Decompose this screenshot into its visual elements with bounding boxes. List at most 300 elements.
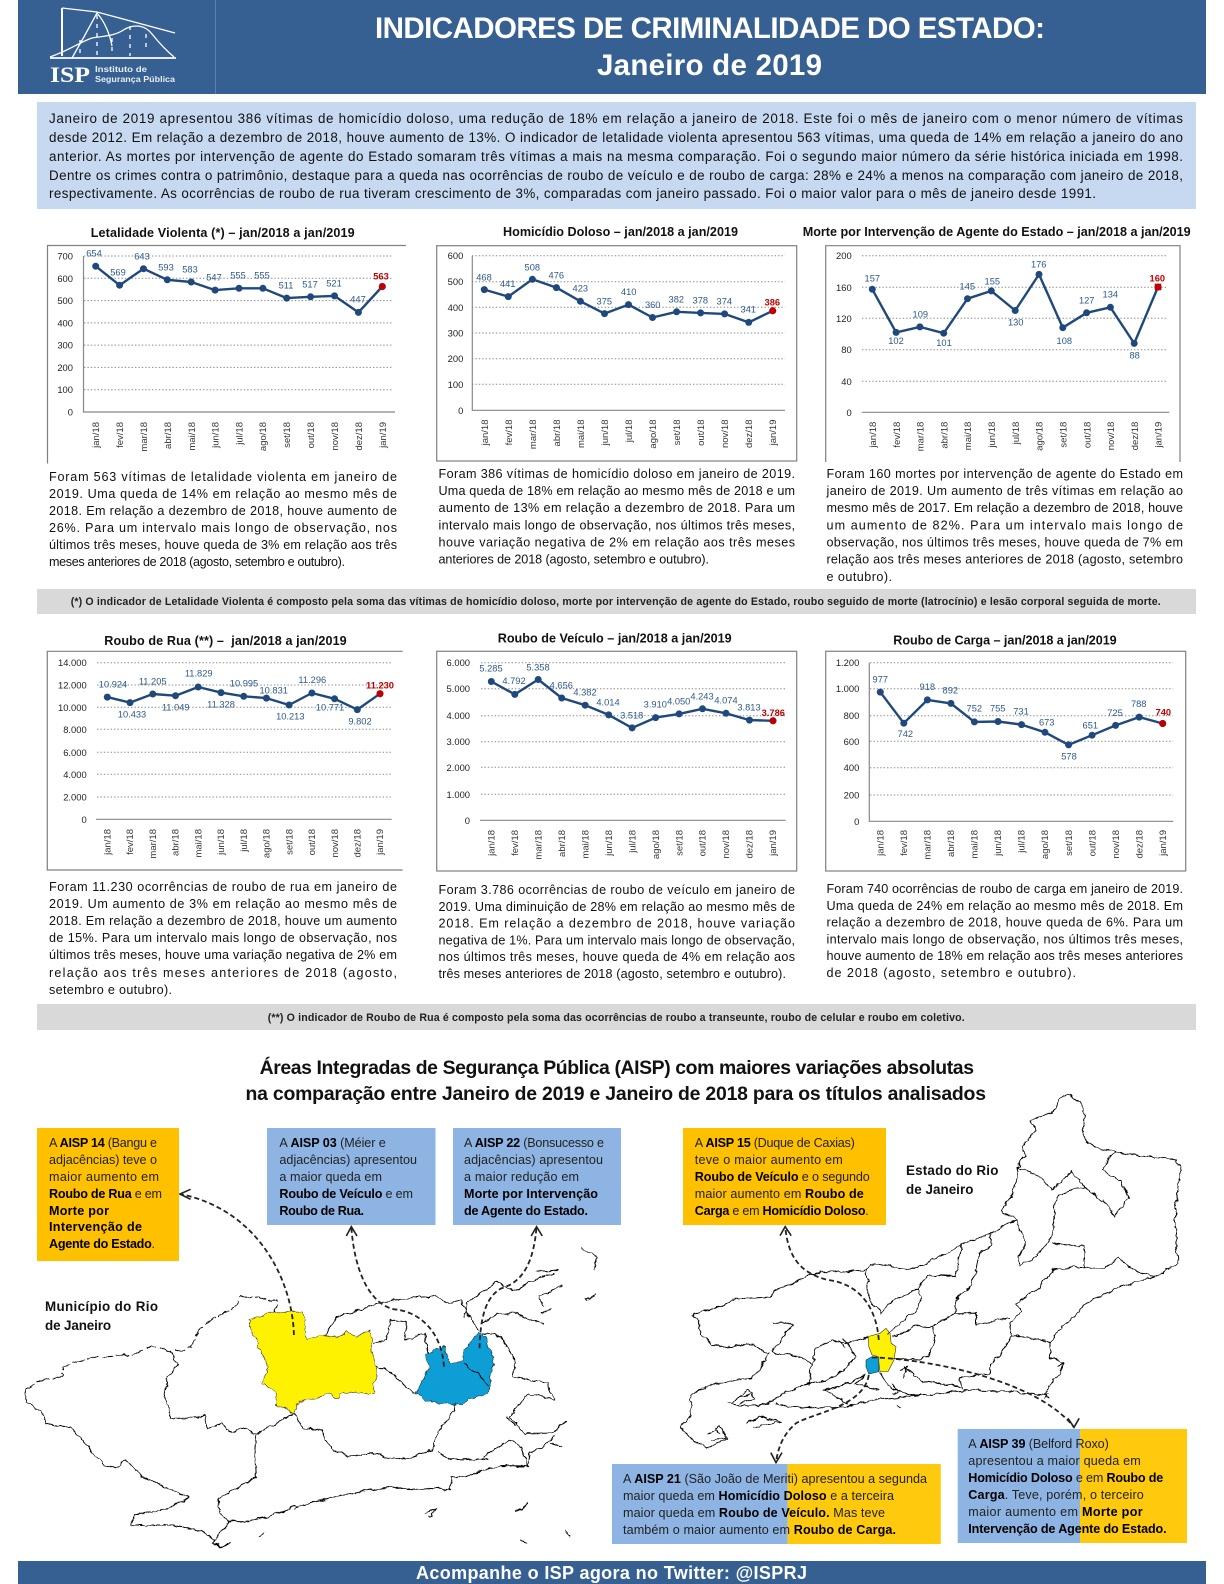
chart: Homicídio Doloso: 423 — [573, 283, 588, 293]
text: Roubo de Rua: 2019. Um aumento de 3% em relação ao mesmo mês de — [49, 897, 397, 911]
chart: Homicídio Doloso: 400 — [448, 302, 463, 313]
text: Roubo de Veículo — [438, 883, 795, 981]
chart: Homicídio Doloso: set/18 — [672, 420, 683, 445]
chart: Morte por Intervenção de Agente do Estado: 40 — [841, 376, 852, 387]
chart: Homicídio Doloso: mar/18 — [528, 420, 539, 449]
footnote band: Roubo de Rua — [37, 1004, 1196, 1030]
chart: Letalidade Violenta: 569 — [110, 268, 126, 278]
chart: Letalidade Violenta: mar/18 — [139, 422, 150, 452]
chart: Morte por Intervenção de Agente do Estado: 145 — [960, 281, 975, 291]
section heading: AISP — [246, 1056, 986, 1105]
label: Estado do Rio de Janeiro: Estado do Rio — [906, 1163, 998, 1178]
chart: Morte por Intervenção de Agente do Estado: 101 — [936, 338, 952, 348]
chart: Roubo de Carga: 578 — [1061, 751, 1077, 761]
chart: Morte por Intervenção de Agente do Estado: mar/18 — [916, 422, 927, 451]
chart: Roubo de Veículo: 2.000 — [447, 762, 470, 773]
arrow: AISP 14 — [180, 1189, 294, 1335]
chart: Roubo de Carga: 400 — [844, 762, 859, 773]
callout: AISP 15: maior aumento em Roubo de — [695, 1187, 864, 1201]
chart: Roubo de Carga: 788 — [1131, 699, 1146, 709]
chart: Morte por Intervenção de Agente do Estado: abr/18 — [939, 422, 950, 449]
callout: AISP 22: a maior redução em — [464, 1170, 579, 1184]
text: Letalidade Violenta: últimos três meses, houve queda de 3% em relação aos três — [49, 538, 397, 552]
chart title: Homicídio Doloso – jan/2018 a jan/2019 — [503, 225, 738, 239]
chart: Roubo de Rua — [47, 634, 403, 870]
callout: AISP 22 — [453, 1128, 621, 1225]
text: Roubo de Carga: Foram 740 ocorrências de roubo de carga em janeiro de 2019. — [826, 882, 1183, 896]
chart: Roubo de Veículo: 5.358 — [526, 662, 550, 672]
chart: Morte por Intervenção de Agente do Estado: 102 — [888, 336, 904, 346]
callout: AISP 15: A AISP 15 (Duque de Caxias) — [695, 1136, 855, 1150]
chart: Roubo de Rua: 9.802 — [348, 717, 372, 727]
chart: Roubo de Rua: 11.296 — [298, 675, 326, 685]
text: Roubo de Rua — [49, 880, 397, 997]
chart: Roubo de Carga: 977 — [873, 674, 888, 684]
chart: Letalidade Violenta: 555 — [254, 270, 270, 280]
callout: AISP 22: de Agente do Estado. — [464, 1204, 588, 1218]
chart: Roubo de Veículo: 4.050 — [667, 696, 690, 706]
chart title: Morte por Intervenção de Agente do Estado – jan/2018 a jan/2019 — [803, 225, 1191, 239]
logo: ISP — [50, 8, 176, 87]
callout: AISP 39: Intervenção de Agente do Estado. — [968, 1522, 1167, 1536]
chart: Roubo de Carga: 800 — [844, 710, 859, 721]
chart: Morte por Intervenção de Agente do Estado: fev/18 — [892, 422, 903, 448]
chart: Roubo de Rua: 2.000 — [63, 792, 87, 802]
chart: Roubo de Veículo: 3.786 — [762, 708, 785, 718]
text: Roubo de Veículo: negativa de 1%. Para um intervalo mais longo de observação, — [438, 934, 795, 948]
text: Roubo de Carga: de 2018 (agosto, setembro e outubro). — [826, 966, 1076, 980]
text: Roubo de Carga: houve aumento de 18% em relação aos três meses anteriores — [826, 949, 1183, 963]
chart: Roubo de Veículo: mai/18 — [580, 830, 591, 859]
chart: Morte por Intervenção de Agente do Estado: nov/18 — [1106, 422, 1117, 450]
chart: Homicídio Doloso: 508 — [525, 262, 540, 272]
chart: Roubo de Carga: 742 — [898, 729, 913, 739]
text: Roubo de Veículo: 2018. Em relação a dezembro de 2018, houve variação — [438, 916, 795, 930]
chart: Roubo de Veículo: 3.000 — [447, 736, 470, 747]
text: Letalidade Violenta: 2019. Uma queda de 14% em relação ao mesmo mês de — [49, 487, 397, 501]
chart: Roubo de Rua: 8.000 — [63, 724, 87, 735]
chart: Homicídio Doloso: jan/19 — [768, 420, 779, 446]
text: Letalidade Violenta: 2018. Em relação a dezembro de 2018, houve aumento de — [49, 504, 397, 518]
chart: Letalidade Violenta: 517 — [302, 280, 318, 290]
chart: Roubo de Rua: dez/18 — [352, 829, 364, 858]
chart: Letalidade Violenta: jun/18 — [210, 422, 222, 449]
chart: Roubo de Veículo: 3.518 — [620, 710, 643, 720]
chart: Letalidade Violenta: out/18 — [306, 422, 317, 448]
callout: AISP 14: Agente do Estado. — [49, 1237, 155, 1251]
chart: Morte por Intervenção de Agente do Estado: 88 — [1130, 350, 1140, 360]
callout: AISP 21: maior queda em Roubo de Veículo. Mas teve — [623, 1506, 885, 1520]
chart: Letalidade Violenta: 511 — [279, 280, 293, 290]
label: Município do Rio de Janeiro — [45, 1299, 158, 1333]
chart: Morte por Intervenção de Agente do Estado: 160 — [836, 282, 852, 293]
chart: Letalidade Violenta: 583 — [182, 264, 198, 274]
label: Estado do Rio de Janeiro: de Janeiro — [906, 1182, 973, 1197]
chart: Letalidade Violenta: set/18 — [282, 422, 293, 448]
text: Morte por Intervenção: janeiro de 2019. Um aumento de três vítimas em relação ao — [826, 484, 1183, 498]
chart: Letalidade Violenta: 100 — [57, 384, 73, 395]
chart: Roubo de Rua: 11.049 — [162, 702, 190, 712]
chart: Homicídio Doloso: ago/18 — [648, 420, 659, 449]
chart: Roubo de Veículo: 4.656 — [550, 681, 573, 691]
chart: Roubo de Veículo: dez/18 — [745, 830, 756, 859]
chart: Roubo de Rua: 10.831 — [259, 685, 288, 695]
chart: Letalidade Violenta: 200 — [57, 362, 73, 373]
chart: Roubo de Carga: set/18 — [1064, 830, 1075, 856]
chart: Letalidade Violenta: dez/18 — [354, 422, 365, 451]
chart: Letalidade Violenta: 547 — [206, 272, 222, 282]
text: Roubo de Veículo: 2019. Uma diminuição de 28% em relação ao mesmo mês de — [438, 900, 795, 914]
chart: Roubo de Rua: 10.771 — [316, 702, 344, 712]
callout: AISP 21: maior queda em Homicídio Doloso e a terceira — [623, 1489, 894, 1503]
chart: Roubo de Rua: 0 — [81, 814, 87, 825]
chart: Morte por Intervenção de Agente do Estado — [803, 225, 1191, 462]
callout: AISP 39: Homicídio Doloso e em Roubo de — [968, 1471, 1163, 1485]
chart: Letalidade Violenta: fev/18 — [115, 422, 126, 448]
summary text panel: desde 2012. Em relação a dezembro de 2018, houve aumento de 13%. O indicador de letalidade violenta apresentou 563 vítimas, uma queda de 14% em relação a janeiro do ano — [49, 130, 1183, 145]
chart: Homicídio Doloso: jul/18 — [624, 420, 635, 443]
chart: Roubo de Rua: 10.995 — [230, 679, 258, 689]
chart: Roubo de Veículo: nov/18 — [721, 830, 732, 859]
chart title: Roubo de Rua (**) – jan/2018 a jan/2019 — [104, 634, 347, 648]
chart: Letalidade Violenta: 0 — [68, 406, 73, 418]
chart: Roubo de Rua: 10.000 — [58, 702, 87, 713]
chart: Homicídio Doloso: 0 — [458, 405, 463, 416]
callout: AISP 14 — [37, 1128, 179, 1261]
text: Roubo de Veículo: nos últimos três meses, houve queda de 4% em relação aos — [438, 950, 795, 964]
text: Roubo de Carga: intervalo mais longo de observação, nos últimos três meses, — [826, 932, 1183, 946]
arrow: AISP 39 — [872, 1357, 1079, 1427]
chart: Roubo de Carga — [826, 634, 1186, 871]
chart: Roubo de Rua: ago/18 — [262, 829, 273, 858]
arrow: AISP 03 — [346, 1227, 444, 1367]
chart: Letalidade Violenta: nov/18 — [330, 422, 341, 451]
chart: Roubo de Rua: jun/18 — [216, 829, 227, 856]
chart: Homicídio Doloso — [437, 225, 797, 461]
section heading: AISP: Áreas Integradas de Segurança Pública (AISP) com maiores variações absolutas — [260, 1056, 974, 1079]
map: Estado do Rio de Janeiro — [679, 1093, 1181, 1463]
chart: Homicídio Doloso: 386 — [765, 297, 780, 307]
text: Homicídio Doloso: Foram 386 vítimas de homicídio doloso em janeiro de 2019. — [438, 467, 795, 481]
chart: Morte por Intervenção de Agente do Estado: out/18 — [1082, 422, 1093, 448]
callout: AISP 39: maior aumento em Morte por — [968, 1505, 1143, 1519]
callout: AISP 22: adjacências) apresentou — [464, 1153, 603, 1167]
text: Morte por Intervenção: mesmo mês de 2017. Em relação a dezembro de 2018, houve — [826, 501, 1183, 515]
chart: Roubo de Rua: 10.213 — [276, 711, 305, 721]
text: Homicídio Doloso — [438, 467, 795, 566]
chart: Letalidade Violenta: 563 — [373, 272, 389, 282]
chart: Roubo de Carga: 740 — [1156, 708, 1171, 718]
chart: Homicídio Doloso: jun/18 — [600, 420, 611, 446]
chart: Roubo de Carga: abr/18 — [946, 830, 957, 857]
footer banner: Acompanhe o ISP agora no Twitter: @ISPRJ — [416, 1563, 807, 1583]
chart: Roubo de Carga: ago/18 — [1040, 830, 1051, 859]
highlighted AISP 03 and 22 (blue) — [416, 1332, 494, 1405]
chart: Morte por Intervenção de Agente do Estado: 200 — [836, 250, 852, 261]
logo: ISP: Segurança Pública — [95, 75, 176, 84]
chart: Homicídio Doloso: 468 — [476, 272, 492, 282]
chart: Roubo de Rua: jan/19 — [375, 829, 386, 856]
callout: AISP 21 — [612, 1464, 941, 1544]
text: Morte por Intervenção — [826, 467, 1183, 584]
chart: Roubo de Veículo: abr/18 — [557, 830, 568, 857]
chart: Morte por Intervenção de Agente do Estado: 157 — [865, 273, 880, 283]
chart: Morte por Intervenção de Agente do Estado: 120 — [836, 313, 852, 324]
callout: AISP 15: Roubo de Veículo e o segundo — [695, 1170, 870, 1184]
text: Roubo de Rua: 2018. Em relação a dezembro de 2018, houve um aumento — [49, 914, 397, 928]
chart: Roubo de Veículo: 4.243 — [690, 691, 714, 701]
label: Estado do Rio de Janeiro — [906, 1163, 998, 1197]
callout: AISP 21: A AISP 21 (São João de Meriti) apresentou a segunda — [623, 1472, 927, 1486]
chart: Morte por Intervenção de Agente do Estado: 134 — [1103, 289, 1118, 299]
text: Homicídio Doloso: anteriores de 2018 (agosto, setembro e outubro). — [438, 552, 709, 566]
chart: Roubo de Veículo: 4.014 — [596, 698, 620, 708]
chart: Homicídio Doloso: abr/18 — [552, 420, 563, 446]
text: Homicídio Doloso: Uma queda de 18% em relação ao mesmo mês de 2018 e um — [438, 484, 795, 498]
highlighted AISP 14 (yellow) — [249, 1312, 377, 1413]
chart: Roubo de Carga: 918 — [920, 682, 935, 692]
chart: Roubo de Carga: 1.200 — [836, 657, 859, 668]
chart: Letalidade Violenta: 654 — [86, 248, 102, 258]
data line — [872, 274, 1158, 343]
chart: Roubo de Carga: 731 — [1013, 706, 1029, 716]
chart: Morte por Intervenção de Agente do Estado: 176 — [1031, 259, 1046, 269]
text: Roubo de Veículo: três meses anteriores de 2018 (agosto, setembro e outubro). — [438, 967, 786, 981]
text: Morte por Intervenção: relação aos três meses anteriores de 2018 (agosto, setembro — [826, 552, 1183, 566]
chart: Roubo de Veículo — [437, 632, 797, 871]
chart: Morte por Intervenção de Agente do Estado: jul/18 — [1011, 422, 1022, 445]
callout: AISP 39 — [958, 1429, 1187, 1543]
chart: Letalidade Violenta: mai/18 — [187, 422, 198, 451]
chart: Morte por Intervenção de Agente do Estado: 127 — [1079, 295, 1094, 305]
chart: Morte por Intervenção de Agente do Estado: 0 — [846, 407, 852, 418]
chart: Morte por Intervenção de Agente do Estado: mai/18 — [963, 422, 974, 450]
chart: Roubo de Veículo: jun/18 — [604, 830, 615, 857]
chart: Roubo de Veículo: 5.285 — [479, 663, 503, 673]
text: Letalidade Violenta: Foram 563 vítimas de letalidade violenta em janeiro de — [49, 470, 397, 484]
chart: Roubo de Rua: mai/18 — [193, 829, 204, 858]
callout: AISP 39: Carga. Teve, porém, o terceiro — [968, 1488, 1144, 1502]
chart: Roubo de Rua: 10.433 — [118, 709, 146, 719]
chart: Roubo de Carga: dez/18 — [1134, 830, 1145, 859]
callout: AISP 39: apresentou a maior queda em — [968, 1454, 1141, 1468]
chart: Homicídio Doloso: 378 — [693, 296, 708, 306]
chart: Letalidade Violenta: jan/19 — [378, 422, 389, 449]
chart: Roubo de Carga: 0 — [854, 816, 859, 827]
chart: Homicídio Doloso: 341 — [741, 304, 756, 314]
chart: Morte por Intervenção de Agente do Estado: 155 — [985, 276, 1000, 286]
text: Roubo de Rua: setembro e outubro). — [49, 983, 172, 997]
chart: Roubo de Rua: 11.829 — [185, 669, 213, 679]
chart: Roubo de Veículo: jul/18 — [627, 830, 638, 854]
chart: Letalidade Violenta: 700 — [57, 250, 73, 262]
label: Município do Rio de Janeiro: Município do Rio — [45, 1299, 158, 1314]
chart: Roubo de Veículo: fev/18 — [510, 830, 521, 856]
chart: Letalidade Violenta: jul/18 — [234, 422, 246, 446]
callout: AISP 39: A AISP 39 (Belford Roxo) — [968, 1437, 1109, 1451]
highlighted AISP 21 (blue) — [866, 1357, 879, 1374]
chart: Morte por Intervenção de Agente do Estado: dez/18 — [1130, 422, 1141, 450]
chart: Roubo de Rua: 11.328 — [207, 700, 235, 710]
text: Morte por Intervenção: Foram 160 mortes por intervenção de agente do Estado em — [826, 467, 1183, 481]
data line — [491, 680, 773, 728]
chart: Morte por Intervenção de Agente do Estado: 109 — [913, 309, 928, 319]
chart: Roubo de Rua: mar/18 — [148, 829, 159, 859]
chart: Homicídio Doloso: dez/18 — [744, 420, 755, 448]
chart: Homicídio Doloso: 600 — [448, 250, 463, 261]
chart: Letalidade Violenta: 521 — [326, 278, 342, 288]
text: Roubo de Veículo: Foram 3.786 ocorrências de roubo de veículo em janeiro de — [438, 883, 795, 897]
chart: Roubo de Veículo: 5.000 — [447, 683, 470, 694]
text: Morte por Intervenção: um aumento de 82%. Para um intervalo mais longo de — [826, 518, 1183, 532]
summary text panel: anterior. As mortes por intervenção de agente do Estado somaram três vítimas a mais na mesma comparação. Foi o segundo maior número da série histórica iniciada em 1998. — [49, 149, 1183, 164]
chart: Roubo de Veículo: 3.813 — [737, 702, 761, 712]
data line — [96, 266, 382, 312]
chart: Roubo de Veículo: jan/19 — [768, 830, 779, 857]
chart: Roubo de Rua: 6.000 — [63, 747, 87, 758]
text: Roubo de Rua: últimos três meses, houve uma variação negativa de 2% em — [49, 948, 397, 962]
chart: Roubo de Carga: 755 — [990, 703, 1005, 713]
callout: AISP 03: Roubo de Rua. — [279, 1204, 364, 1218]
arrow: AISP 15 — [780, 1227, 879, 1340]
header banner — [18, 0, 1206, 94]
callout: AISP 14: Intervenção de — [49, 1220, 142, 1234]
data line — [880, 692, 1163, 745]
callout: AISP 15 — [683, 1128, 886, 1225]
chart: Roubo de Veículo: 0 — [465, 815, 470, 826]
chart: Roubo de Rua: jul/18 — [239, 829, 250, 853]
summary text panel: Janeiro de 2019 apresentou 386 vítimas de homicídio doloso, uma redução de 18% em relação a janeiro de 2018. Este foi o mês de janeiro com o menor número de vítimas — [49, 111, 1183, 126]
chart: Homicídio Doloso: 410 — [621, 287, 636, 297]
chart: Roubo de Rua: nov/18 — [330, 829, 341, 858]
callout: AISP 03 — [267, 1128, 436, 1225]
text: Morte por Intervenção: e outubro). — [826, 570, 892, 584]
chart: Letalidade Violenta: 400 — [57, 317, 73, 328]
chart: Homicídio Doloso: 476 — [549, 270, 564, 280]
chart: Morte por Intervenção de Agente do Estado: 130 — [1008, 317, 1023, 327]
callout: AISP 22: Morte por Intervenção — [464, 1187, 598, 1201]
chart: Letalidade Violenta — [48, 226, 406, 464]
chart: Roubo de Rua: out/18 — [307, 829, 318, 855]
chart: Roubo de Carga: 651 — [1083, 720, 1098, 730]
map: Município do Rio de Janeiro — [25, 1189, 597, 1547]
text: Homicídio Doloso: intervalo mais longo de observação, nos últimos três meses, — [438, 518, 795, 532]
chart: Morte por Intervenção de Agente do Estado: jun/18 — [987, 422, 998, 449]
chart: Letalidade Violenta: 300 — [57, 340, 73, 351]
chart title: Letalidade Violenta (*) – jan/2018 a jan/2019 — [91, 226, 355, 240]
text: Roubo de Rua: relação aos três meses anteriores de 2018 (agosto, — [49, 966, 397, 980]
chart: Roubo de Carga: 892 — [943, 685, 958, 695]
text: Letalidade Violenta — [49, 470, 397, 569]
chart title: Roubo de Carga – jan/2018 a jan/2019 — [893, 634, 1117, 648]
chart: Roubo de Carga: out/18 — [1087, 830, 1098, 856]
chart: Roubo de Veículo: ago/18 — [651, 830, 662, 859]
chart: Homicídio Doloso: 500 — [448, 276, 463, 287]
chart: Roubo de Rua: 12.000 — [58, 680, 87, 690]
chart: Roubo de Carga: 725 — [1107, 708, 1123, 718]
chart: Roubo de Carga: 200 — [844, 790, 859, 800]
chart: Morte por Intervenção de Agente do Estado: jan/19 — [1154, 422, 1165, 449]
chart: Homicídio Doloso: 100 — [448, 379, 463, 390]
chart: Roubo de Carga: 673 — [1039, 717, 1054, 727]
chart: Homicídio Doloso: 382 — [669, 294, 684, 304]
chart: Letalidade Violenta: 555 — [230, 270, 246, 280]
main title — [375, 12, 1045, 82]
chart: Roubo de Rua: 10.924 — [99, 680, 127, 690]
callout: AISP 14: Morte por — [49, 1204, 109, 1218]
callout: AISP 15: teve o maior aumento em — [695, 1153, 843, 1167]
chart: Homicídio Doloso: fev/18 — [504, 420, 515, 445]
section heading: AISP: na comparação entre Janeiro de 2019 e Janeiro de 2018 para os títulos analisados — [246, 1083, 986, 1105]
chart: Roubo de Veículo: 1.000 — [447, 789, 470, 800]
footnote band: Letalidade Violenta — [37, 589, 1196, 614]
chart: Morte por Intervenção de Agente do Estado: set/18 — [1058, 422, 1070, 448]
chart: Letalidade Violenta: 593 — [158, 262, 174, 272]
text: Roubo de Carga — [826, 882, 1183, 980]
arrow: AISP 22 — [480, 1227, 542, 1348]
callout: AISP 03: a maior queda em — [279, 1170, 382, 1184]
callout: AISP 14: Roubo de Rua e em — [49, 1187, 162, 1201]
chart: Roubo de Rua: 4.000 — [63, 769, 87, 780]
chart: Homicídio Doloso: 200 — [448, 353, 463, 364]
chart: Roubo de Rua: jan/18 — [102, 829, 114, 856]
callout: AISP 03: Roubo de Veículo e em — [279, 1187, 413, 1201]
chart: Roubo de Veículo: 4.074 — [714, 695, 738, 705]
text: Letalidade Violenta: 26%. Para um intervalo mais longo de observação, nos — [49, 521, 397, 535]
chart: Roubo de Veículo: 4.382 — [573, 687, 597, 697]
logo: ISP: Instituto de — [95, 65, 148, 74]
chart: Roubo de Rua: 14.000 — [58, 657, 87, 668]
chart: Roubo de Carga: jan/18 — [876, 830, 886, 857]
chart: Homicídio Doloso: 441 — [500, 279, 515, 289]
text: Letalidade Violenta: meses anteriores de 2018 (agosto, setembro e outubro). — [49, 555, 345, 569]
chart: Roubo de Veículo: set/18 — [674, 830, 685, 856]
municipal outlines — [25, 1248, 597, 1547]
callout: AISP 21: também o maior aumento em Roubo de Carga. — [623, 1523, 896, 1537]
chart: Roubo de Rua: 11.230 — [366, 680, 394, 690]
callout: AISP 14: maior aumento em — [49, 1170, 159, 1184]
chart: Roubo de Carga: fev/18 — [899, 830, 910, 856]
chart: Homicídio Doloso: nov/18 — [720, 420, 731, 448]
arrow: AISP 21 — [771, 1375, 869, 1463]
callout: AISP 22: A AISP 22 (Bonsucesso e — [464, 1136, 604, 1150]
main title: INDICADORES DE CRIMINALIDADE DO ESTADO: — [375, 12, 1045, 45]
callout: AISP 15: Carga e em Homicídio Doloso. — [695, 1204, 869, 1218]
chart: Letalidade Violenta: abr/18 — [163, 422, 174, 449]
text: Roubo de Rua: Foram 11.230 ocorrências de roubo de rua em janeiro de — [49, 880, 397, 894]
chart title: Roubo de Veículo – jan/2018 a jan/2019 — [498, 632, 732, 646]
footnote band: Letalidade Violenta: (*) O indicador de Letalidade Violenta é composto pela soma das vítimas de homicídio doloso, morte por intervenção de agente do Estado, roubo seguido de morte (latrocínio) e lesão corporal seguida de morte. — [71, 596, 1161, 608]
state outlines — [679, 1093, 1181, 1448]
chart: Homicídio Doloso: 300 — [448, 328, 463, 338]
summary text panel: Dentre os crimes contra o patrimônio, destaque para a queda nas ocorrências de roubo de veículo e de roubo de carga: 28% e 24% a menos na comparação com janeiro de 2018, — [49, 168, 1183, 183]
chart: Roubo de Carga: 1.000 — [836, 683, 859, 694]
chart: Roubo de Carga: mai/18 — [970, 830, 981, 859]
chart: Roubo de Carga: jun/18 — [993, 830, 1004, 857]
chart: Roubo de Carga: 600 — [844, 736, 859, 747]
footer banner — [18, 1561, 1206, 1584]
chart: Roubo de Carga: nov/18 — [1111, 830, 1122, 859]
text: Roubo de Carga: relação a dezembro de 2018, houve queda de 6%. Para um — [826, 916, 1183, 930]
chart: Letalidade Violenta: 643 — [134, 252, 150, 262]
highlighted AISP 15 (yellow) — [868, 1328, 896, 1372]
data line — [107, 687, 380, 710]
chart: Roubo de Rua: set/18 — [284, 829, 295, 855]
chart: Homicídio Doloso: 375 — [597, 296, 612, 306]
summary text panel: respectivamente. As ocorrências de roubo de rua tiveram crescimento de 3%, comparadas com janeiro passado. Foi o maior valor para o mês de janeiro desde 1991. — [49, 186, 1096, 201]
chart: Morte por Intervenção de Agente do Estado: 108 — [1057, 336, 1072, 346]
chart: Roubo de Rua: 11.205 — [139, 677, 167, 687]
